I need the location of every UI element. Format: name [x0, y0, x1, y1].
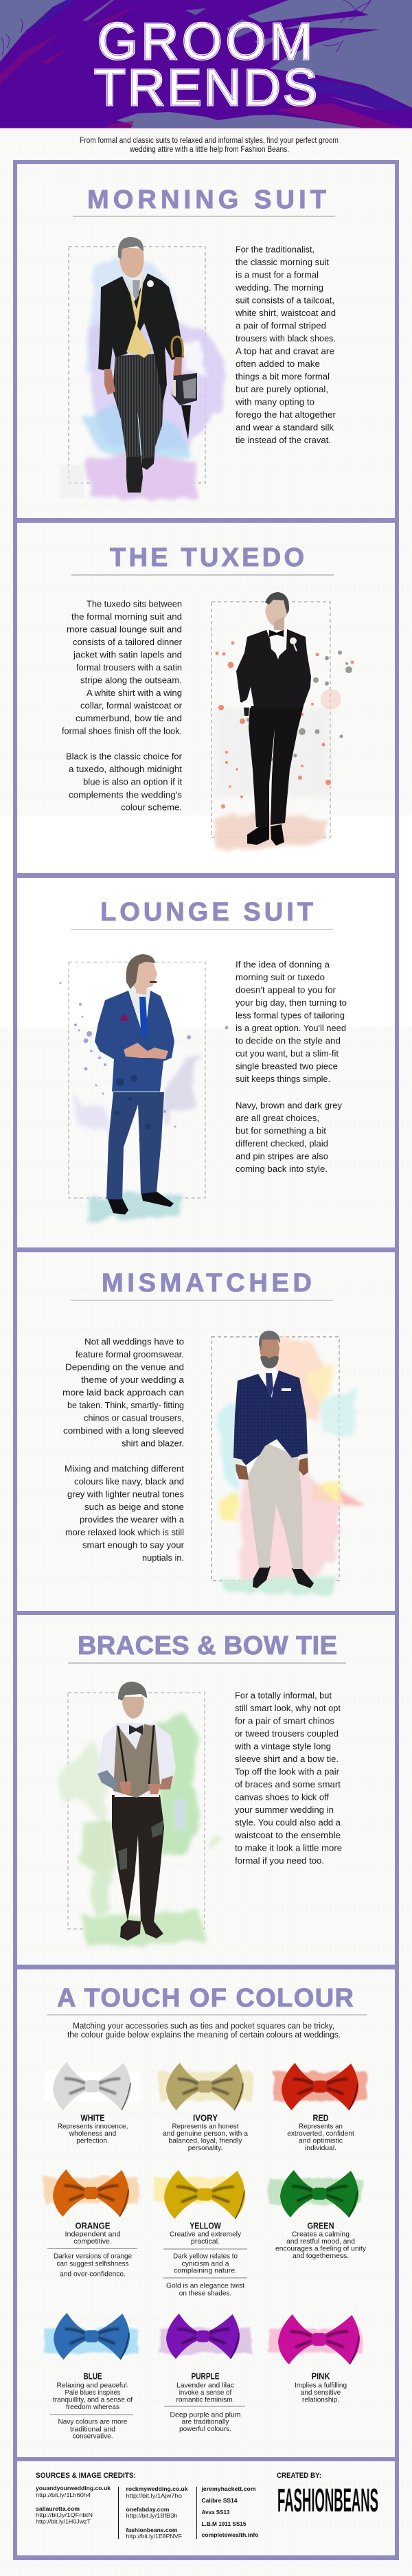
credits column two: http://bit.ly/1E8PNVF	[126, 2533, 182, 2540]
body text: lounge suit: doesn't appeal to you for	[236, 985, 336, 995]
credits column one: http://bit.ly/1QFnbtN	[36, 2511, 93, 2518]
credits column three: Calibre SS14	[202, 2497, 238, 2504]
intro text: From formal and classic suits to relaxed and informal styles, find your perfect groom	[80, 137, 339, 145]
colour: yellow: cynicism and a	[181, 2260, 229, 2268]
body text: mismatched: such as beige and stone	[84, 1502, 184, 1512]
body text: the tuxedo: jacket with satin lapels and	[73, 650, 182, 659]
body text: morning suit: is a must for a formal	[236, 269, 319, 280]
credits column one: http://bit.ly/1H0JwzT	[36, 2518, 91, 2525]
credits column two: onefabday.com	[126, 2506, 170, 2513]
heading: morning suit: MORNING SUIT	[87, 185, 326, 214]
body text: braces and bow tie: of braces and some smart	[235, 1779, 341, 1789]
colour: green: Creates a calming	[292, 2231, 350, 2238]
intro text: wedding attire with a little help from Fashion Beans.	[129, 146, 289, 154]
body text: the tuxedo: formal trousers with a satin	[76, 662, 182, 673]
body text: braces and bow tie: still smart look, why not opt	[235, 1703, 341, 1713]
body text: lounge suit: to decide on the style and	[236, 1036, 341, 1046]
body text: the tuxedo: cummerbund, bow tie and	[76, 713, 182, 723]
body text: morning suit: For the traditionalist,	[236, 245, 314, 254]
body text: morning suit: often added to make	[236, 359, 320, 369]
body text: the tuxedo: colour scheme.	[121, 802, 182, 812]
colour: yellow: on these shades.	[179, 2290, 231, 2297]
colour: red: RED	[313, 2113, 328, 2123]
body text: lounge suit: your big day, then turning to	[236, 997, 347, 1008]
body text: braces and bow tie: Top off the look with a pair	[235, 1767, 340, 1776]
body text: mismatched: shirt and blazer.	[122, 1438, 184, 1448]
body text: braces and bow tie: or tweed trousers coupled	[235, 1728, 339, 1739]
colour: yellow: Creative and extremely	[170, 2231, 242, 2238]
title: TRENDS	[94, 58, 317, 116]
body text: braces and bow tie: canvas shoes to kick off	[235, 1792, 329, 1803]
body text: morning suit: a pair of formal striped	[236, 320, 326, 331]
body text: mismatched: feature formal groomswear.	[76, 1349, 184, 1359]
credits column three: completewealth.info	[202, 2531, 258, 2538]
colour: yellow: YELLOW	[190, 2222, 221, 2231]
credits column one: http://bit.ly/1Lh60h4	[36, 2492, 91, 2498]
body text: mismatched: combined with a long sleeved	[63, 1425, 184, 1436]
head	[265, 598, 289, 626]
colour: pink	[269, 2314, 361, 2404]
body text: the tuxedo: a tuxedo, although midnight	[69, 764, 182, 774]
intro text: colour guide: the colour guide below explains the meaning of certain colours at weddings.	[67, 2031, 341, 2040]
intro text	[80, 137, 339, 154]
colour: orange: ORANGE	[76, 2222, 110, 2231]
credits column two	[126, 2485, 188, 2540]
body text: braces and bow tie: sleeve shirt and a bow tie.	[235, 1754, 339, 1764]
panel: a touch of colour	[17, 1969, 395, 2457]
body text: mismatched: be taken. Think, smartly- fitting	[67, 1400, 184, 1410]
body text: lounge suit: but for something a bit	[236, 1125, 326, 1136]
body text: mismatched: chinos or casual trousers,	[84, 1412, 184, 1423]
title: GROOM	[98, 12, 312, 70]
body text: morning suit: tie instead of the cravat.	[236, 435, 331, 445]
colour: white	[45, 2062, 141, 2145]
heading: mismatched: MISMATCHED	[102, 1269, 312, 1298]
header banner	[0, 0, 412, 128]
colour: ivory	[159, 2063, 252, 2152]
body text: lounge suit: coming back into style.	[236, 1164, 328, 1174]
body text: morning suit: white shirt, waistcoat and	[235, 308, 336, 318]
intro text: colour guide	[67, 2022, 341, 2040]
body text: lounge suit: cut you want, but a slim-fit	[236, 1048, 339, 1059]
body text: lounge suit: Navy, brown and dark grey	[236, 1100, 343, 1110]
body text: lounge suit: less formal types of tailoring	[236, 1010, 345, 1021]
colour: yellow: practical.	[191, 2238, 220, 2246]
credits column one: sallauretta.com	[36, 2505, 80, 2512]
panel: mismatched	[17, 1252, 395, 1611]
colour: purple: Deep purple and plum	[170, 2411, 240, 2419]
panel: lounge suit	[17, 878, 395, 1247]
body text: the tuxedo: stripe along the outseam.	[80, 675, 182, 686]
sources heading: SOURCES & IMAGE CREDITS:	[36, 2472, 136, 2480]
colour: purple: romantic feminism.	[176, 2396, 235, 2404]
body text: mismatched: provides the wearer with a	[80, 1514, 185, 1525]
colour: orange: competitive.	[73, 2238, 112, 2246]
credits column two: fashionbeans.com	[126, 2527, 178, 2533]
body text: lounge suit: single breasted two piece	[236, 1061, 338, 1072]
body text: lounge suit	[236, 959, 347, 1174]
credits column three: Avva SS13	[202, 2509, 230, 2516]
colour: blue: Navy colours are more	[58, 2418, 128, 2426]
body text: lounge suit: is a great option. You'll need	[236, 1023, 346, 1033]
colour: ivory: and genuine person, with a	[163, 2130, 248, 2138]
head	[260, 1340, 279, 1368]
panel: sources and credits	[17, 2461, 395, 2555]
body text: morning suit: the classic morning suit	[236, 257, 329, 267]
body text: braces and bow tie: to make it look a little more	[235, 1842, 342, 1853]
colour: red: Represents an	[299, 2123, 343, 2131]
colour: pink: PINK	[312, 2371, 330, 2381]
colour: blue: tranquillity, and a sense of	[53, 2396, 133, 2404]
colour: green	[269, 2170, 367, 2260]
body text: morning suit: things a bit more formal	[236, 371, 330, 382]
panel: morning suit	[17, 164, 395, 518]
colour: ivory: personality.	[188, 2145, 222, 2152]
credits column three: jeremyhackett.com	[201, 2485, 256, 2492]
credits column one: youandyourwedding.co.uk	[36, 2485, 111, 2492]
body text: braces and bow tie: with a vintage style long	[234, 1741, 331, 1752]
watercolour wash	[217, 1336, 365, 1594]
heading: the tuxedo: THE TUXEDO	[110, 543, 304, 572]
colour: white: perfection.	[76, 2138, 109, 2145]
panel: the tuxedo	[17, 523, 395, 873]
body text: mismatched: Depending on the venue and	[65, 1362, 184, 1372]
colour: blue: Pale blues inspires	[65, 2389, 121, 2397]
colour: white: WHITE	[81, 2113, 104, 2123]
colour: red: and optimistic	[299, 2138, 343, 2145]
title: GROOM	[98, 12, 312, 70]
body text: morning suit	[235, 245, 336, 445]
body text: morning suit: with many opting to	[235, 397, 314, 407]
body text: mismatched: colours like navy, black and	[74, 1476, 184, 1487]
colour: orange: can suggest selfishness	[56, 2260, 129, 2268]
body text: morning suit: A top hat and cravat are	[236, 346, 334, 356]
colour: ivory: Represents an honest	[172, 2123, 239, 2131]
colour: yellow	[154, 2170, 247, 2297]
body text: mismatched: grey with lighter neutral tones	[67, 1489, 184, 1499]
colour: purple: are traditionally	[181, 2418, 229, 2426]
body text: the tuxedo: the formal morning suit and	[71, 611, 182, 622]
intro text: colour guide: Matching your accessories such as ties and pocket squares can be tricky,	[73, 2022, 334, 2031]
colour: pink: Implies a fulfilling	[295, 2382, 347, 2389]
head	[122, 1697, 144, 1719]
body text: lounge suit: are all great choices,	[236, 1113, 319, 1123]
colour: green: and restful mood, and	[286, 2238, 355, 2246]
body text: braces and bow tie: for a pair of smart chinos	[235, 1716, 334, 1726]
body text: the tuxedo: consists of a tailored dinner	[73, 637, 183, 647]
body text: morning suit: trousers with black shoes.	[236, 333, 336, 343]
body text: mismatched: nuptials in.	[142, 1552, 184, 1563]
body text: morning suit: and wear a standard silk	[236, 422, 334, 433]
body text: braces and bow tie: waistcoat to the ensemble	[234, 1830, 341, 1840]
body text: the tuxedo: The tuxedo sits between	[87, 599, 182, 609]
colour: orange: and over-confidence.	[60, 2271, 126, 2278]
body text: mismatched	[62, 1337, 185, 1563]
body text: the tuxedo	[62, 599, 183, 812]
umbrella and top hat	[172, 337, 197, 440]
body text: braces and bow tie: style. You could also add a	[235, 1818, 341, 1827]
figure: man in navy jacket and stone trousers	[233, 1331, 314, 1588]
colour: blue: BLUE	[84, 2371, 102, 2381]
body text: braces and bow tie: formal if you need too.	[235, 1855, 324, 1866]
colour: orange: Darker versions of orange	[54, 2253, 132, 2260]
splatter wash	[214, 642, 354, 850]
colour: pink: relationship.	[302, 2396, 339, 2404]
colour: blue: Relaxing and peaceful.	[56, 2382, 129, 2389]
title	[94, 12, 317, 116]
head	[119, 247, 144, 278]
colour: blue	[45, 2313, 138, 2440]
watercolour wash	[55, 1714, 223, 1945]
colour: purple: Lavender and lilac	[176, 2382, 234, 2389]
body text: the tuxedo: formal shoes finish off the look.	[62, 725, 182, 736]
colour: ivory: IVORY	[193, 2113, 218, 2123]
body text: morning suit: suit consists of a tailcoat,	[236, 295, 334, 305]
heading: lounge suit: LOUNGE SUIT	[100, 898, 313, 927]
title: TRENDS	[94, 58, 317, 116]
colour: white: Represents innocence,	[58, 2123, 128, 2131]
body text: the tuxedo: Black is the classic choice for	[66, 752, 183, 761]
head	[129, 962, 157, 995]
colour: purple: PURPLE	[191, 2371, 220, 2381]
heading: braces and bow tie: BRACES & BOW TIE	[78, 1631, 337, 1660]
colour: white: wholeness and	[69, 2130, 117, 2138]
credits column two: http://bit.ly/1BfB3h	[126, 2512, 178, 2519]
body text: mismatched: Mixing and matching different	[65, 1463, 184, 1474]
body text: braces and bow tie: your summer wedding in	[235, 1805, 334, 1815]
credits column one	[36, 2485, 111, 2525]
body text: the tuxedo: collar, formal waistcoat or	[80, 701, 183, 710]
colour: purple: invoke a sense of	[179, 2389, 231, 2397]
colour: yellow: Dark yellow relates to	[173, 2253, 238, 2260]
panel: braces and bow tie	[17, 1615, 395, 1965]
credits column three: L.B.M 1911 SS15	[202, 2520, 247, 2527]
purple brush stroke	[0, 0, 412, 128]
body text: lounge suit: different checked, plaid	[236, 1138, 328, 1149]
body text: lounge suit: suit keeps things simple.	[236, 1074, 330, 1084]
colour: yellow: complaining nature.	[174, 2267, 237, 2275]
colour: orange	[45, 2169, 138, 2278]
body text: lounge suit: If the idea of donning a	[236, 959, 330, 970]
colour: green: encourages a feeling of unity	[275, 2245, 367, 2253]
colour: red: extroverted, confident	[287, 2130, 354, 2138]
created by heading: CREATED BY:	[277, 2472, 321, 2480]
body text: morning suit: wedding. The morning	[235, 282, 323, 293]
figure: man in blue lounge suit	[95, 954, 174, 1214]
colour: yellow: Gold is an elegance twist	[166, 2282, 244, 2290]
colour: green: GREEN	[308, 2222, 334, 2231]
colour: blue: conservative.	[73, 2433, 113, 2440]
body text: mismatched: more relaxed look which is still	[65, 1527, 184, 1537]
colour: blue: freedom whereas	[66, 2404, 119, 2411]
credits column two: rockmywedding.co.uk	[126, 2485, 188, 2492]
splatter wash	[59, 982, 228, 1224]
body text: lounge suit: and pin stripes are also	[236, 1151, 328, 1161]
colour: orange: Independent and	[65, 2231, 121, 2238]
body text: mismatched: smart enough to say your	[82, 1540, 185, 1550]
colour: ivory: balanced, loyal, friendly	[169, 2138, 242, 2145]
body text: the tuxedo: A white shirt with a wing	[87, 688, 182, 698]
colour: pink: and sensitive	[301, 2389, 341, 2397]
body text: braces and bow tie	[234, 1690, 342, 1866]
figure: man with braces and bow tie	[96, 1682, 176, 1941]
body text: braces and bow tie: For a totally informal, but	[235, 1690, 332, 1701]
body text: the tuxedo: more casual lounge suit and	[67, 624, 182, 635]
figure: man in tuxedo	[236, 592, 311, 846]
colour: green: and togetherness.	[293, 2252, 349, 2260]
body text: mismatched: Not all weddings have to	[84, 1337, 184, 1346]
credits column three	[201, 2485, 258, 2538]
body text: lounge suit: morning suit or tuxedo	[236, 972, 325, 982]
body text: mismatched: theme of your wedding a	[81, 1375, 185, 1385]
heading: a touch of colour: A TOUCH OF COLOUR	[57, 1984, 354, 2013]
figure: man in morning suit	[98, 237, 197, 493]
colour: red: individual.	[305, 2145, 336, 2152]
body text: morning suit: forego the hat altogether	[236, 409, 336, 420]
body text: the tuxedo: complements the wedding's	[69, 790, 182, 800]
credits column two: http://bit.ly/1Ajw7ho	[126, 2492, 182, 2499]
watercolour wash	[82, 256, 227, 499]
body text: mismatched: more laid back approach can	[62, 1388, 184, 1397]
body text: the tuxedo: blue is also an option if it	[83, 776, 182, 787]
colour: purple	[159, 2314, 251, 2433]
colour: red	[273, 2063, 367, 2152]
colour: purple: powerful colours.	[179, 2426, 231, 2433]
colour: blue: traditional and	[70, 2426, 115, 2433]
body text: morning suit: but are purely optional,	[236, 384, 328, 394]
